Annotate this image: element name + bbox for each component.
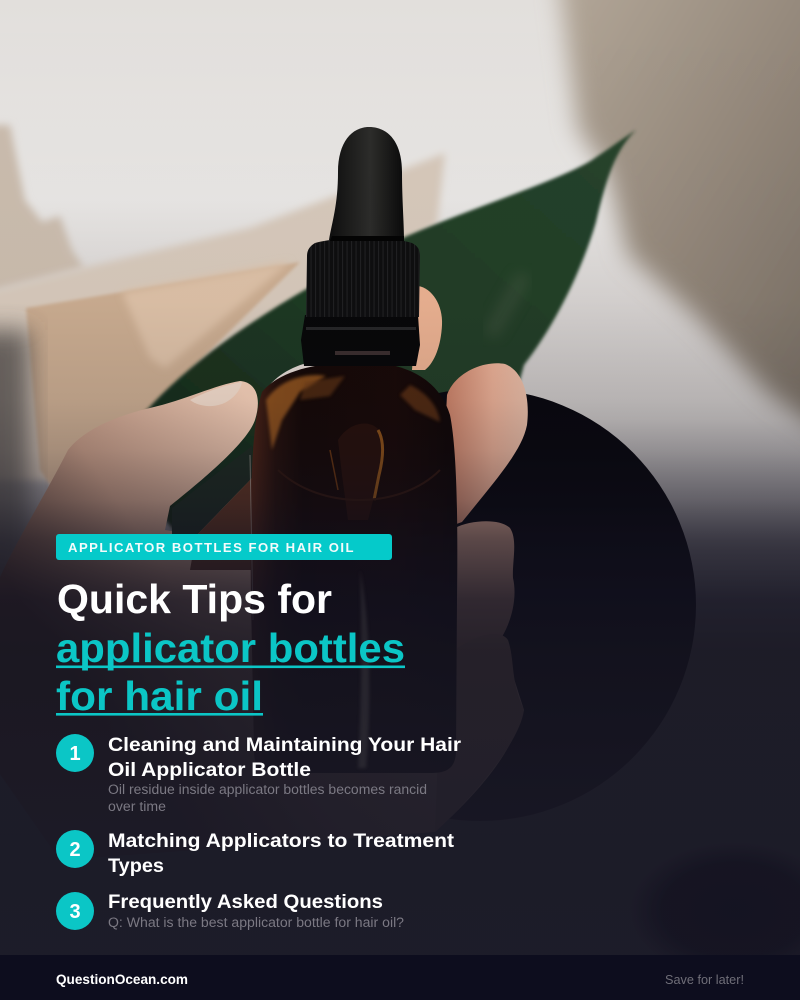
title: Quick Tips for: [57, 576, 332, 622]
title: applicator bottles: [56, 625, 405, 671]
site name: QuestionOcean.com: [56, 971, 188, 987]
title: [56, 576, 405, 719]
badge: APPLICATOR BOTTLES FOR HAIR OIL: [68, 541, 355, 555]
tip 1 description: over time: [108, 799, 166, 814]
tip 3 heading: Frequently Asked Questions: [108, 891, 383, 913]
number badge 3: [56, 892, 94, 930]
title: for hair oil: [56, 673, 263, 719]
number badge 1: [56, 734, 94, 772]
tip 3: [56, 891, 404, 930]
tip 2 heading: Types: [108, 855, 164, 877]
number badge 1: 1: [69, 743, 81, 765]
tip 2: [56, 830, 455, 877]
number badge 3: 3: [69, 901, 81, 923]
glass bottle highlight: [358, 570, 369, 768]
number badge 2: 2: [69, 839, 81, 861]
number badge 2: [56, 830, 94, 868]
tip 1: [56, 734, 461, 814]
tip 1 description: Oil residue inside applicator bottles becomes rancid: [108, 782, 427, 797]
tip 1 heading: Oil Applicator Bottle: [108, 759, 311, 781]
save note: Save for later!: [665, 972, 744, 987]
tip 3 description: Q: What is the best applicator bottle for hair oil?: [108, 915, 404, 930]
tip 1 description: [108, 782, 427, 814]
dark blurred shape lower right: [630, 842, 800, 978]
tip 2 heading: Matching Applicators to Treatment: [108, 830, 455, 852]
tip 1 heading: Cleaning and Maintaining Your Hair: [108, 734, 461, 756]
tip 1 heading: [108, 734, 461, 781]
tip 2 heading: [108, 830, 455, 877]
badge: [56, 534, 392, 560]
footer bar: [0, 955, 800, 1000]
